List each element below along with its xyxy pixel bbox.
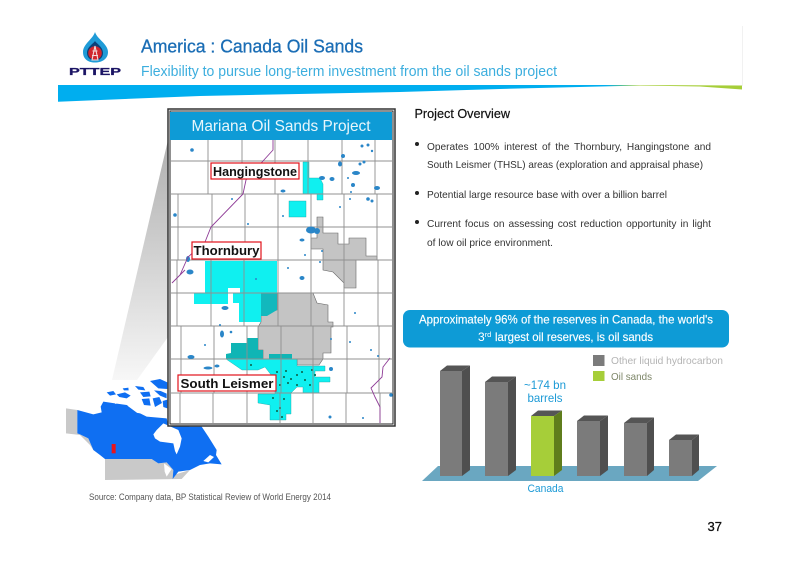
label: Hangingstone: Hangingstone	[213, 164, 297, 179]
bullet 1: Operates 100% interest of the Thornbury, Hangingstone and	[427, 142, 711, 153]
lakes	[173, 144, 393, 419]
bar 5	[624, 418, 654, 476]
bar 1	[440, 366, 470, 476]
header swoosh	[58, 85, 742, 102]
map of Canada	[66, 379, 222, 480]
Arctic channels	[115, 401, 154, 414]
Alaska and USA	[66, 408, 190, 480]
bullet 3: Current focus on assessing cost reduction opportunity in light	[427, 219, 711, 230]
heading: Project Overview	[414, 106, 511, 121]
connector wedge	[112, 140, 168, 380]
Canada landmass	[77, 402, 222, 479]
Hudson Bay	[153, 423, 182, 454]
bar 3: Canada	[531, 410, 562, 476]
callout: 3	[478, 330, 485, 344]
callout: rd	[485, 330, 491, 339]
legend: Oil sands	[611, 371, 652, 383]
bullet 1: South Leismer (THSL) areas (exploration and appraisal phase)	[427, 160, 703, 171]
pipeline	[172, 140, 390, 423]
bar 2	[485, 376, 516, 476]
page number: 37	[708, 519, 722, 534]
bullet 1	[415, 142, 711, 171]
map title bar: Mariana Oil Sands Project	[192, 118, 371, 135]
platform	[422, 466, 717, 481]
Hangingstone leases	[289, 162, 323, 217]
callout: Approximately 96% of the reserves in Canada, the world's	[419, 312, 713, 326]
legend: Other liquid hydrocarbon	[611, 355, 723, 367]
frame	[168, 109, 395, 426]
legend	[593, 355, 723, 383]
logo: PTTEP	[69, 32, 121, 78]
logo: PTTEP: PTTEP	[69, 66, 121, 78]
label: South Leismer: South Leismer	[180, 376, 274, 391]
bar 6	[669, 434, 699, 476]
Gulf of St Lawrence and Great Lakes	[164, 455, 214, 477]
bar 4	[577, 416, 608, 476]
annotation: Canada reserves	[524, 378, 566, 405]
axis label: Canada: Canada	[528, 483, 564, 495]
bullet 3: of low oil price environment.	[427, 238, 553, 249]
bar chart	[422, 355, 723, 495]
source note: Source: Company data, BP Statistical Review of World Energy 2014	[89, 492, 331, 502]
annotation: Canada reserves: ~174 bn	[524, 378, 566, 392]
subtitle: Flexibility to pursue long-term investment from the oil sands project	[141, 64, 557, 80]
map title bar	[170, 112, 392, 140]
township grid	[171, 140, 392, 423]
callout: largest oil reserves, is oil sands	[495, 330, 653, 344]
Arctic islands	[107, 379, 167, 408]
bullet 2: Potential large resource base with over a billion barrel	[427, 190, 667, 201]
annotation: Canada reserves: barrels	[528, 391, 562, 405]
project location marker	[112, 444, 116, 453]
project overview text	[414, 106, 711, 249]
gray leases	[258, 217, 377, 365]
callout	[403, 310, 729, 348]
map panel	[168, 109, 395, 426]
title: America : Canada Oil Sands	[141, 36, 363, 56]
bullet 3	[415, 219, 711, 249]
Thornbury leases	[194, 261, 277, 322]
label: Thornbury: Thornbury	[194, 243, 260, 258]
South Leismer leases	[226, 359, 330, 420]
